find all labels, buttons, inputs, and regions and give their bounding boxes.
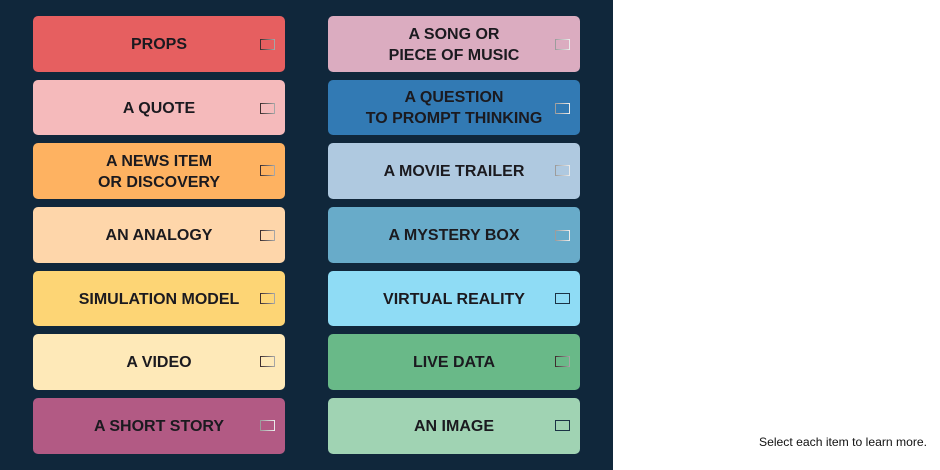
card: an image: AN IMAGE <box>414 418 494 435</box>
card: a news item or discovery <box>33 143 285 199</box>
instruction note: Select each item to learn more. <box>759 435 927 449</box>
card: a news item or discovery: A NEWS ITEM <box>106 153 212 170</box>
card: a question to prompt thinking: A QUESTION <box>405 89 503 106</box>
card: simulation model: SIMULATION MODEL <box>79 291 239 308</box>
card: a quote: A QUOTE <box>123 100 195 117</box>
card: a news item or discovery: OR DISCOVERY <box>98 174 220 191</box>
card: a video <box>33 334 285 390</box>
card: a movie trailer: A MOVIE TRAILER <box>384 163 524 180</box>
card: an analogy: AN ANALOGY <box>106 227 212 244</box>
card: a mystery box <box>328 207 580 262</box>
card: a song or piece of music: PIECE OF MUSIC <box>389 46 519 64</box>
dark background panel <box>0 0 613 470</box>
card: simulation model <box>33 271 285 326</box>
card: a short story: A SHORT STORY <box>94 418 224 435</box>
card: a song or piece of music <box>328 16 580 72</box>
card: virtual reality <box>328 271 580 326</box>
card: a quote <box>33 80 285 135</box>
card: live data <box>328 334 580 390</box>
card: a song or piece of music: A SONG OR <box>409 26 499 42</box>
card: a mystery box: A MYSTERY BOX <box>388 227 519 244</box>
card: live data: LIVE DATA <box>413 354 495 371</box>
card: a question to prompt thinking <box>328 80 580 135</box>
card: an analogy <box>33 207 285 262</box>
card: a question to prompt thinking: TO PROMPT THINKING <box>366 110 542 127</box>
card: props <box>33 16 285 72</box>
card: an image <box>328 398 580 454</box>
card: a video: A VIDEO <box>126 354 192 371</box>
card: a movie trailer <box>328 143 580 199</box>
card: a short story <box>33 398 285 454</box>
card: virtual reality: VIRTUAL REALITY <box>383 291 525 308</box>
card: props: PROPS <box>131 36 187 53</box>
